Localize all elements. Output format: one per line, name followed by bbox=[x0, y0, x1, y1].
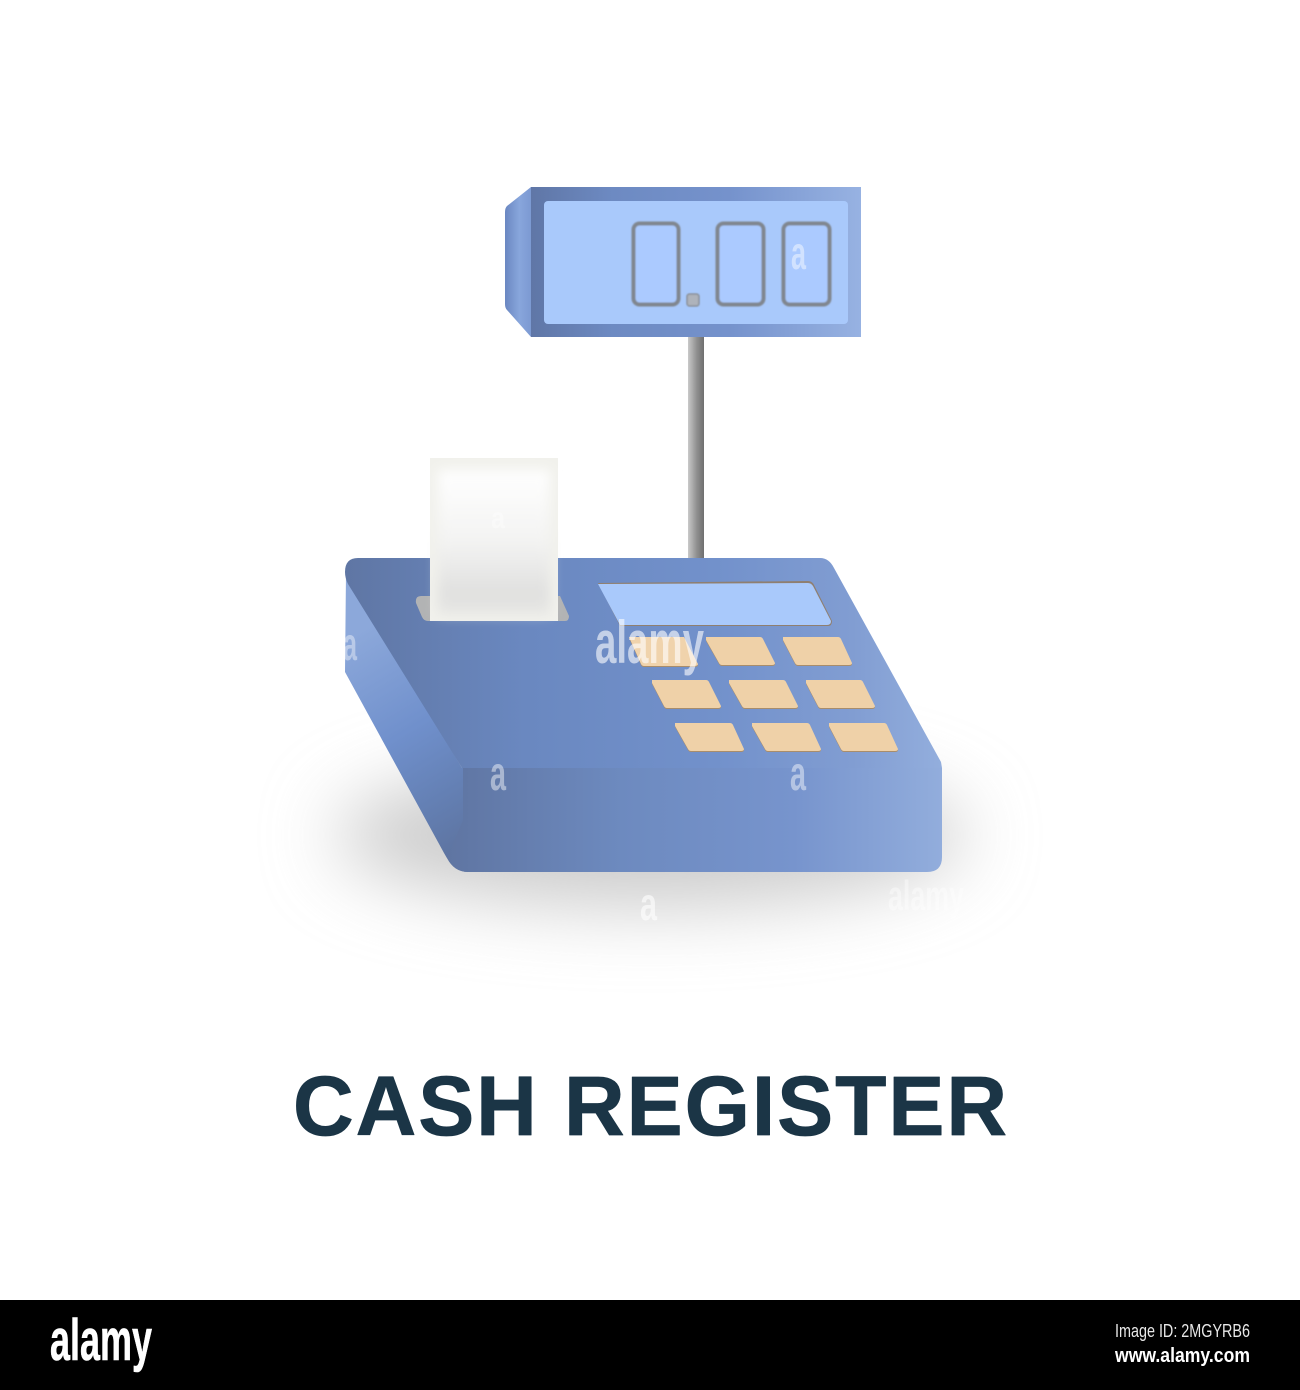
key bbox=[806, 680, 875, 708]
watermark a: a bbox=[491, 502, 505, 535]
watermark alamy: alamy bbox=[595, 609, 704, 676]
key bbox=[729, 680, 798, 708]
display housing bbox=[531, 187, 861, 337]
key bbox=[829, 723, 898, 751]
display pole bbox=[688, 330, 704, 562]
website: www.alamy.com bbox=[1114, 1345, 1250, 1367]
key bbox=[652, 680, 721, 708]
register left side bbox=[345, 572, 490, 872]
image id: Image ID: 2MGYRB6 bbox=[1115, 1321, 1250, 1341]
price display bbox=[505, 187, 861, 337]
key bbox=[706, 637, 775, 665]
receipt paper bbox=[430, 458, 558, 621]
watermark a: a bbox=[791, 227, 806, 279]
key bbox=[675, 723, 744, 751]
register front face bbox=[447, 768, 942, 872]
keypad bbox=[629, 637, 898, 751]
display screen bbox=[544, 201, 848, 324]
digit zero bbox=[634, 224, 678, 304]
floor shadow bbox=[335, 763, 965, 907]
key bbox=[783, 637, 852, 665]
alamy logo: alamy bbox=[50, 1308, 152, 1373]
register top surface bbox=[345, 558, 942, 768]
watermark a: a bbox=[790, 748, 806, 801]
key bbox=[629, 637, 698, 666]
paper slot bbox=[416, 596, 569, 621]
footer bar bbox=[0, 1300, 1300, 1390]
watermark a: a bbox=[640, 878, 657, 930]
digit zero bbox=[718, 224, 764, 304]
digit zero bbox=[784, 224, 830, 304]
keypad screen bbox=[598, 581, 832, 626]
display side face bbox=[505, 187, 531, 337]
watermark a: a bbox=[343, 618, 357, 670]
watermark alamy faint: alamy bbox=[888, 872, 964, 919]
cash register illustration bbox=[345, 187, 942, 872]
key bbox=[752, 723, 821, 751]
title: CASH REGISTER bbox=[293, 1059, 1007, 1153]
watermark a: a bbox=[490, 748, 506, 801]
watermarks bbox=[343, 227, 964, 930]
decimal point bbox=[687, 294, 699, 306]
